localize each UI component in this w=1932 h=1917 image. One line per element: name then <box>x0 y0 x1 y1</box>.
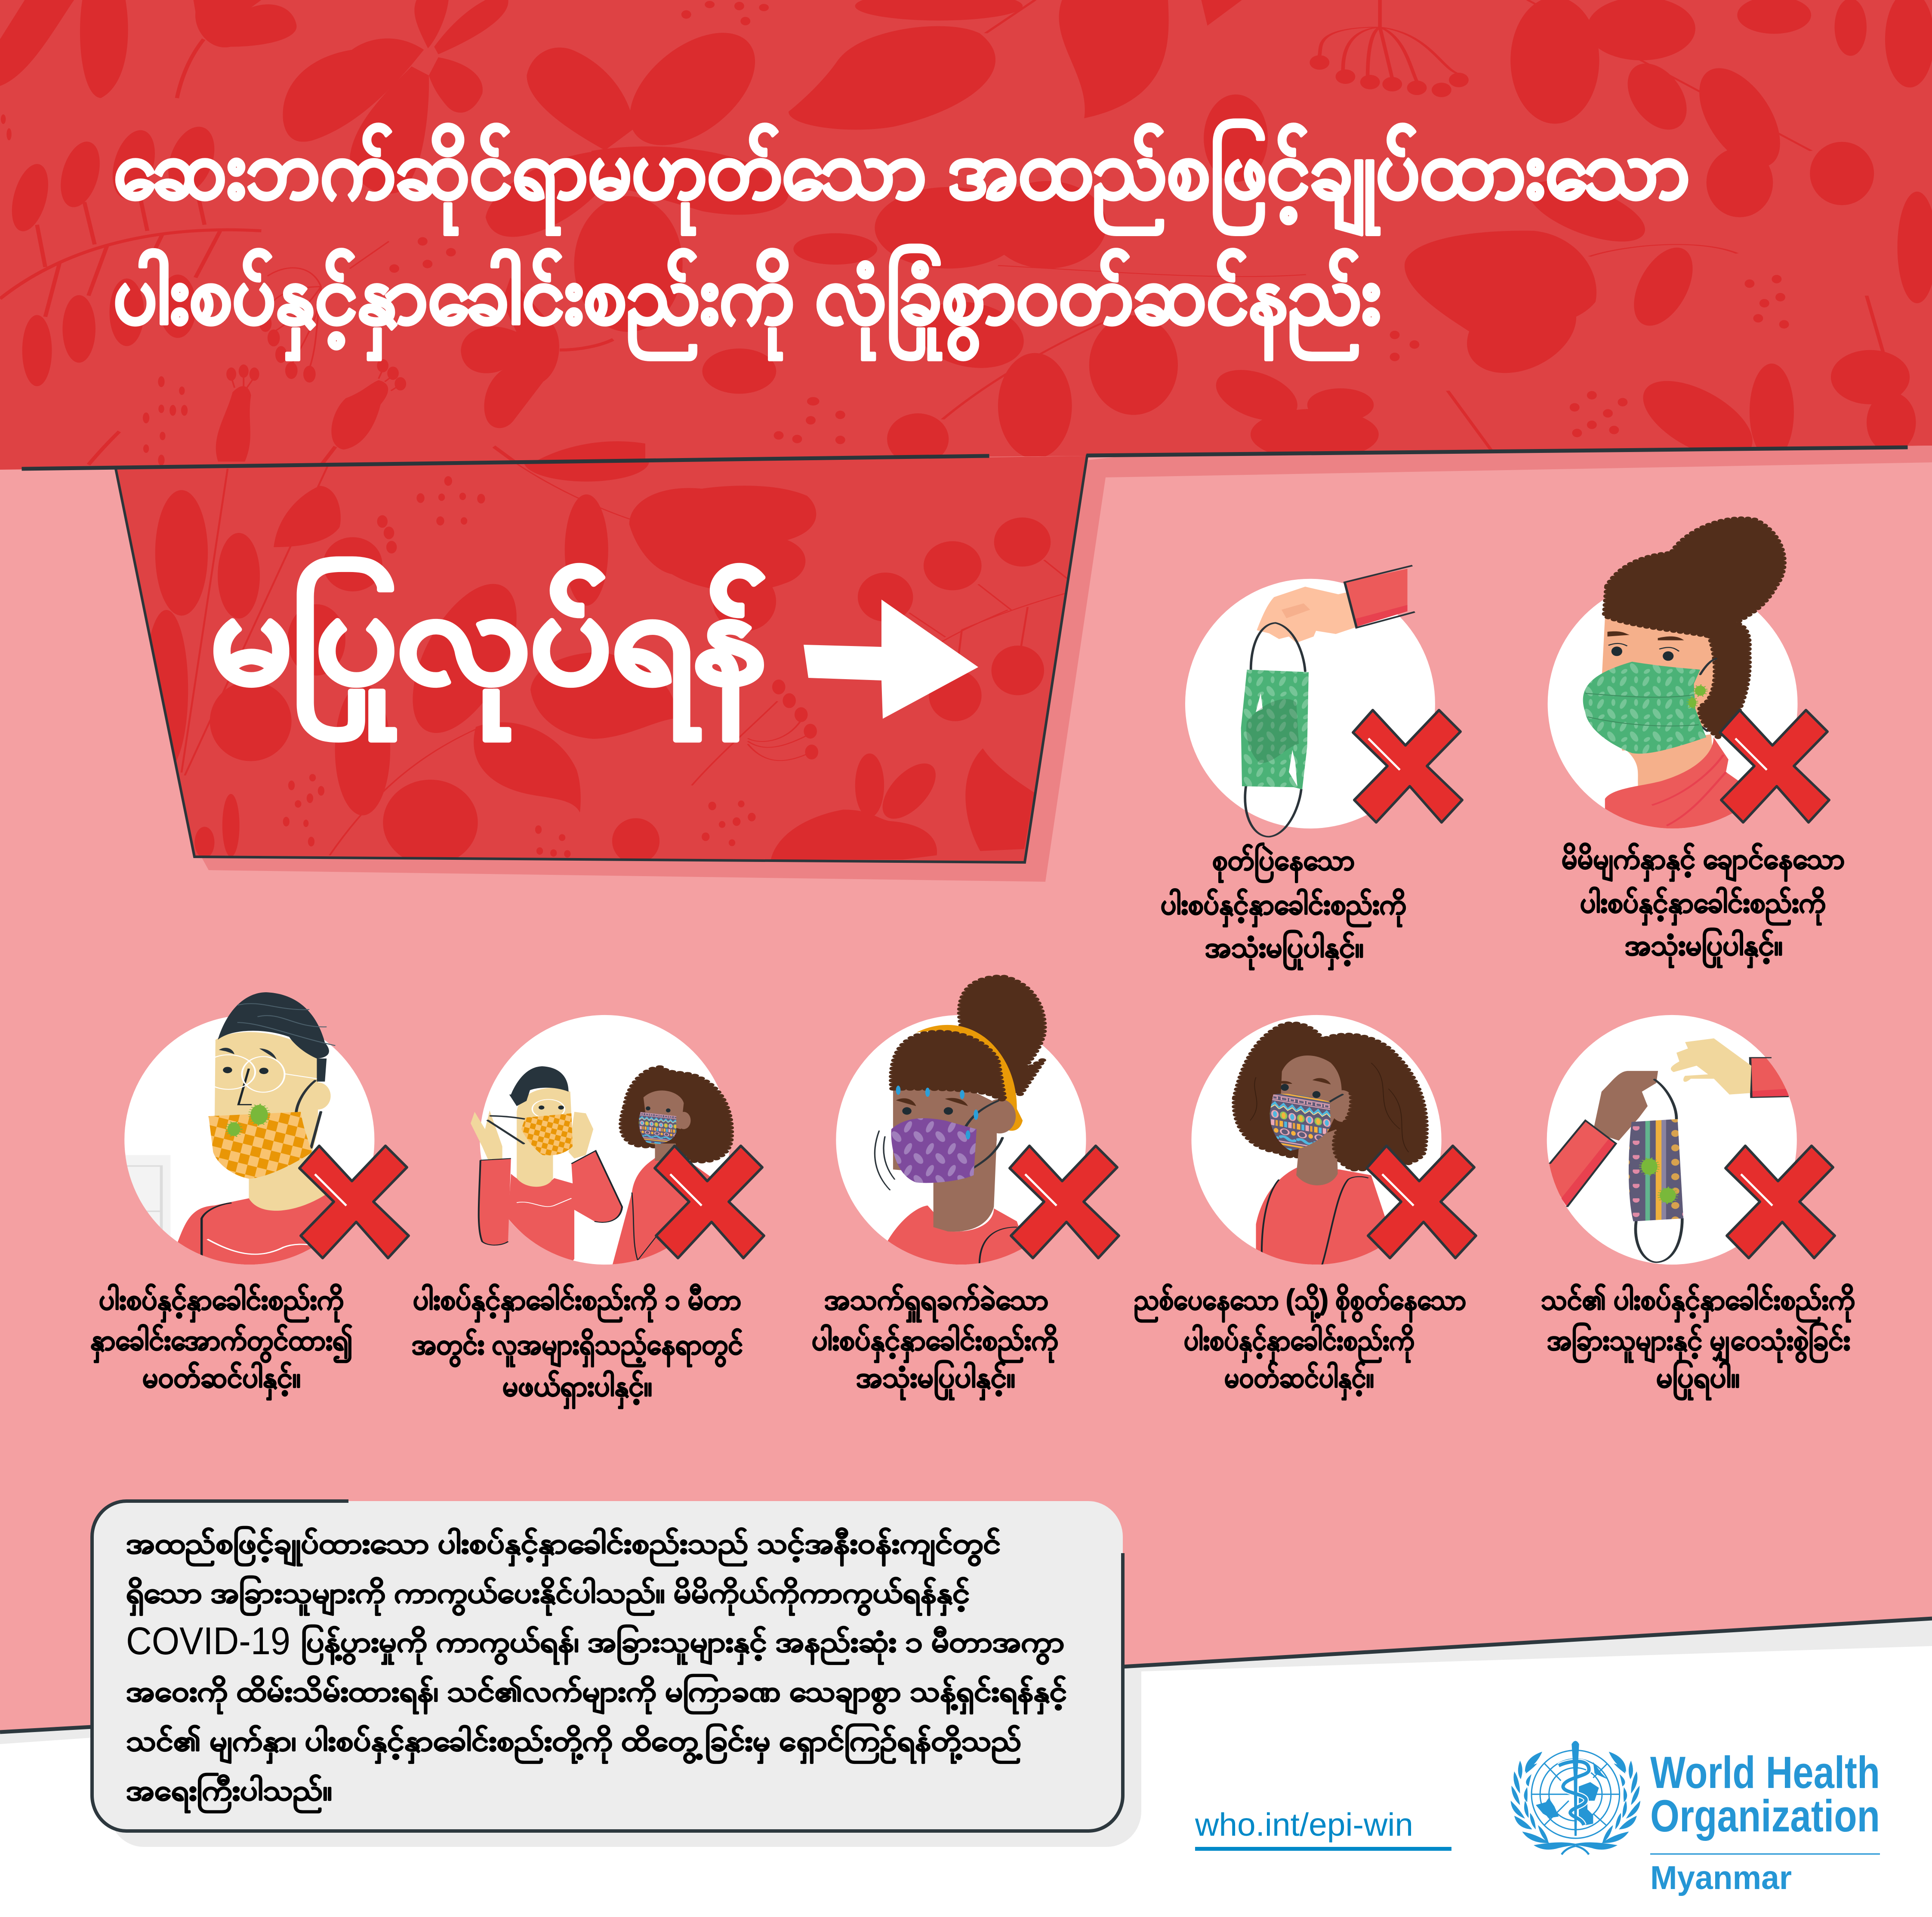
caption: မဝတ်ဆင်ပါနှင့်။ <box>142 1361 301 1400</box>
illustration: man with mask below nose <box>122 992 374 1268</box>
caption: အသုံးမပြုပါနှင့်။ <box>856 1359 1015 1400</box>
icon: cross <box>1353 710 1462 822</box>
panel: removing mask near others <box>412 1015 764 1409</box>
caption: မပြုရပါ။ <box>1656 1359 1740 1400</box>
info box text: အရေးကြီးပါသည်။ <box>126 1772 332 1813</box>
icon: cross <box>655 1146 764 1258</box>
illustration: hand holding torn mask <box>1185 566 1435 837</box>
caption: မဝတ်ဆင်ပါနှင့်။ <box>1224 1361 1374 1400</box>
logo wordmark <box>1650 1748 1880 1896</box>
caption: စုတ်ပြဲနေသော <box>1212 842 1355 883</box>
banner shadow <box>200 446 1932 882</box>
info box text: အထည်စဖြင့်ချုပ်ထားသော ပါးစပ်နှင့်နှာခေါင်းစည်းသည် သင့်အနီးဝန်းကျင်တွင် <box>126 1525 1001 1566</box>
icon: cross <box>1367 1146 1476 1258</box>
caption: မိမိမျက်နှာနှင့် ချောင်နေသော <box>1562 842 1845 882</box>
caption <box>1562 842 1845 968</box>
panel: loose mask <box>1548 518 1845 968</box>
panel: mask under nose <box>90 992 409 1400</box>
icon: cross <box>1010 1146 1119 1258</box>
panel: sharing mask <box>1541 1015 1855 1400</box>
panel: dirty or wet mask <box>1134 1015 1476 1400</box>
title <box>114 120 1690 360</box>
caption: ညစ်ပေနေသော (သို့) စိုစွတ်နေသော <box>1134 1283 1466 1323</box>
icon: WHO emblem <box>1511 1741 1640 1855</box>
banner panel: do not <box>116 442 1087 865</box>
info box text: ရှိသော အခြားသူများကို ကာကွယ်ပေးနိုင်ပါသည်။ မိမိကိုယ်ကိုကာကွယ်ရန်နှင့် <box>126 1575 970 1616</box>
illustration: woman with patterned mask <box>1192 1015 1442 1265</box>
caption: မဖယ်ရှားပါနှင့်။ <box>502 1369 652 1409</box>
caption: အခြားသူများနှင့် မျှဝေသုံးစွဲခြင်း <box>1547 1322 1850 1363</box>
illustration: woman with loose green mask <box>1548 518 1797 829</box>
caption <box>812 1283 1058 1400</box>
caption: ပါးစပ်နှင့်နှာခေါင်းစည်းကို ၁ မီတာ <box>413 1283 741 1323</box>
info box <box>92 1501 1123 1831</box>
caption: ပါးစပ်နှင့်နှာခေါင်းစည်းကို <box>1161 888 1406 927</box>
info box text: အဝေးကို ထိမ်းသိမ်းထားရန်၊ သင်၏လက်များကို မကြာခဏ သေချာစွာ သန့်ရှင်းရန်နှင့် <box>126 1673 1067 1714</box>
caption: အသုံးမပြုပါနှင့်။ <box>1205 929 1364 970</box>
caption: အတွင်း လူအများရှိသည့်နေရာတွင် <box>412 1328 743 1367</box>
title: ပါးစပ်နှင့်နှာခေါင်းစည်းကို လုံခြုံစွာဝတ်ဆင်နည်း <box>114 245 1381 360</box>
caption: နှာခေါင်းအောက်တွင်ထား၍ <box>90 1323 353 1363</box>
info box text: COVID-19 <box>126 1620 290 1663</box>
panel: torn mask <box>1161 566 1462 970</box>
pink background <box>0 387 1932 1732</box>
logo wordmark: Organization <box>1650 1791 1880 1841</box>
title: ဆေးဘက်ဆိုင်ရာမဟုတ်သော အထည်စဖြင့်ချုပ်ထားသော <box>114 120 1690 235</box>
footer band edge line <box>0 1619 1932 1732</box>
info box shadow <box>109 1548 1141 1847</box>
caption <box>1541 1283 1855 1400</box>
logo wordmark: Myanmar <box>1650 1859 1792 1896</box>
illustration: two hands passing a mask <box>1544 1015 1797 1265</box>
icon: cross <box>1720 710 1829 822</box>
caption: ပါးစပ်နှင့်နှာခေါင်းစည်းကို <box>1580 886 1826 926</box>
caption <box>1161 842 1406 970</box>
icon: cross <box>299 1146 409 1258</box>
illustration: man removing mask beside woman <box>471 1015 730 1268</box>
caption: ပါးစပ်နှင့်နှာခေါင်းစည်းကို <box>812 1323 1058 1363</box>
logo wordmark: World Health <box>1650 1748 1880 1798</box>
caption: ပါးစပ်နှင့်နှာခေါင်းစည်းကို <box>99 1283 344 1323</box>
caption <box>412 1283 743 1409</box>
arrow <box>804 600 978 719</box>
website link <box>1195 1806 1451 1851</box>
caption: အသုံးမပြုပါနှင့်။ <box>1625 927 1783 968</box>
caption: သင်၏ ပါးစပ်နှင့်နှာခေါင်းစည်းကို <box>1541 1283 1855 1323</box>
caption <box>90 1283 353 1400</box>
info box text: ပြန့်ပွားမှုကို ကာကွယ်ရန်၊ အခြားသူများနှင့် အနည်းဆုံး ၁ မီတာအကွာ <box>301 1624 1064 1665</box>
website link: who.int/epi-win <box>1195 1806 1413 1843</box>
panel: hard to breathe <box>812 976 1119 1400</box>
banner heading: မပြုလုပ်ရန် <box>211 558 767 742</box>
banner and header outline <box>24 447 1906 862</box>
caption: ပါးစပ်နှင့်နှာခေါင်းစည်းကို <box>1184 1323 1414 1363</box>
red header panel <box>0 0 1932 471</box>
info box text: သင်၏ မျက်နှာ၊ ပါးစပ်နှင့်နှာခေါင်းစည်းတို့ကို ထိတွေ့ခြင်းမှ ရှောင်ကြဉ်ရန်တို့သည် <box>126 1723 1021 1764</box>
info box text <box>126 1525 1067 1813</box>
icon: cross <box>1726 1146 1835 1258</box>
caption: အသက်ရှူရခက်ခဲသော <box>824 1283 1048 1323</box>
WHO logo <box>1511 1741 1880 1896</box>
illustration: woman struggling to breathe <box>836 976 1086 1265</box>
footer band shadow <box>0 1619 1932 1744</box>
caption <box>1134 1283 1466 1400</box>
